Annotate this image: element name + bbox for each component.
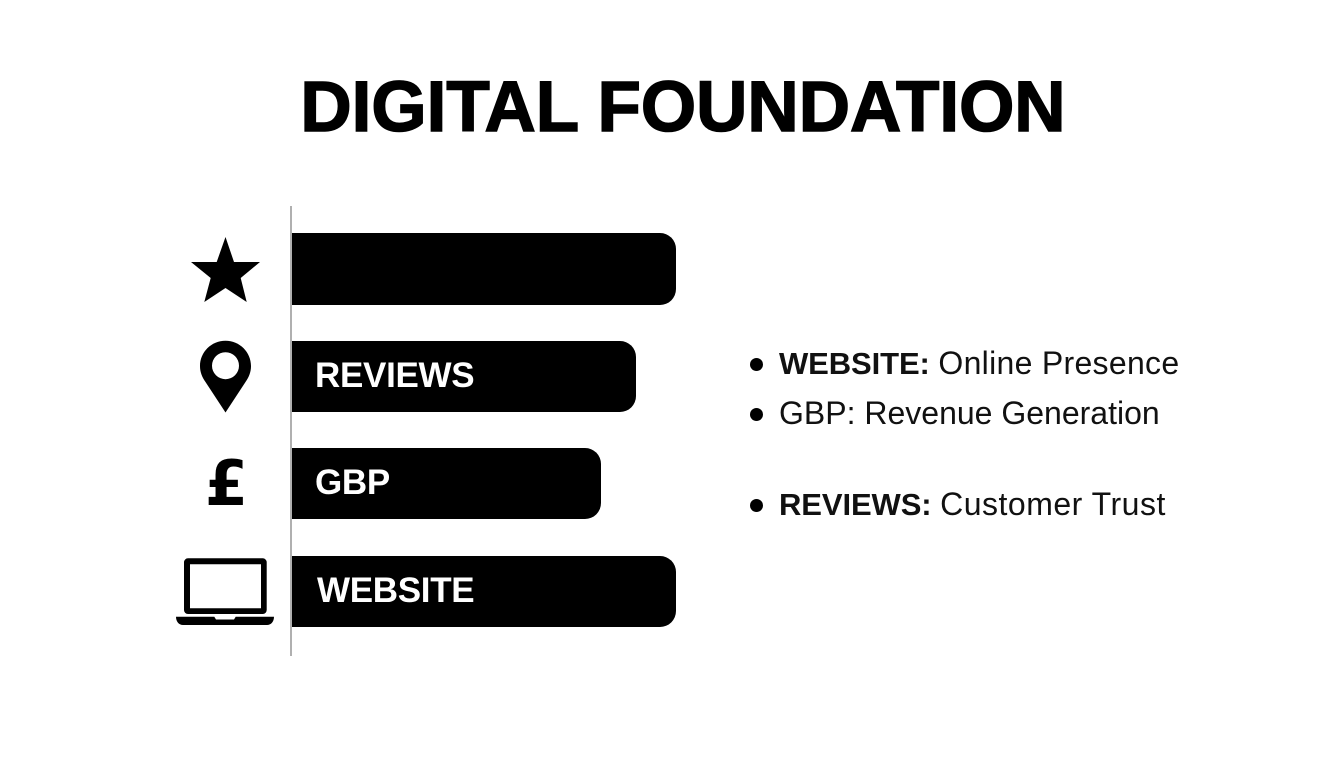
- bar: reviews: [292, 340, 636, 412]
- bar: GBP: GBP: [315, 463, 390, 502]
- bullet: website: WEBSITE: Online Presence: [779, 345, 1179, 381]
- chart axis: [290, 206, 292, 656]
- title: DIGITAL FOUNDATION: [300, 68, 1066, 147]
- bullet: GBP: GBP: Revenue Generation: [779, 395, 1160, 431]
- icon: pound sign: £: [205, 446, 248, 520]
- icon: laptop: [176, 558, 274, 625]
- bar: website: [292, 556, 676, 627]
- icon: star: [191, 237, 260, 302]
- bar: GBP: [292, 448, 601, 519]
- bullet: reviews: REVIEWS: Customer Trust: [779, 486, 1166, 522]
- bar: top unlabelled: [292, 233, 676, 304]
- bar: reviews: REVIEWS: [315, 356, 474, 395]
- icon: location pin: [200, 340, 251, 412]
- bar: website: WEBSITE: [317, 571, 474, 610]
- bullet list: [750, 345, 1179, 522]
